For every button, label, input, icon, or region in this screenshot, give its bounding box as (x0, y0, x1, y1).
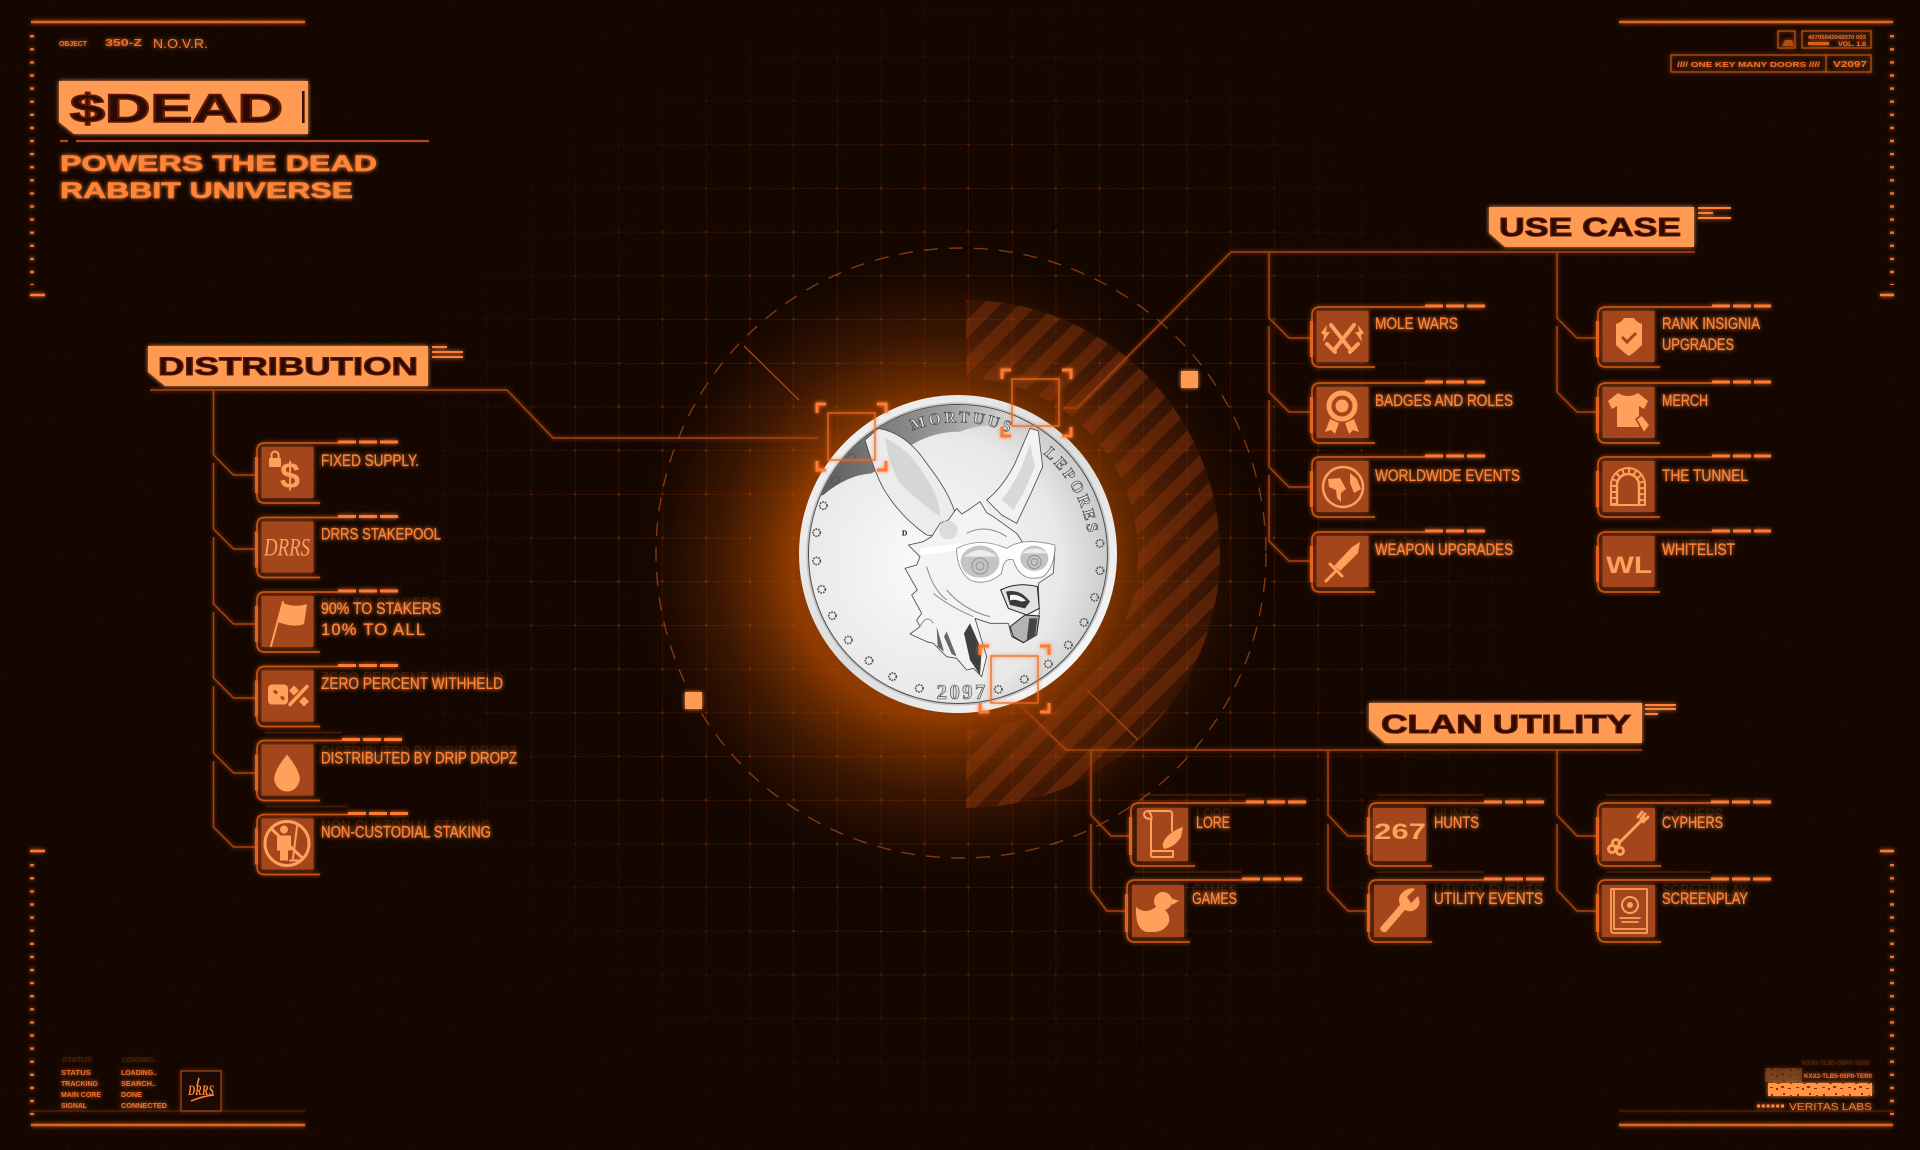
card: non-custodial staking (255, 806, 491, 874)
subtitle (60, 151, 377, 203)
heading: use case (1489, 207, 1731, 247)
label: cyphers: CYPHERS (1662, 814, 1723, 832)
label: games: GAMES (1192, 890, 1237, 908)
icon: 267 numeral: 267 (1374, 819, 1426, 844)
coin: Mortuus Lepores 2097 (799, 395, 1117, 713)
heading: distribution: DISTRIBUTION (158, 353, 418, 381)
label: mole wars: MOLE WARS (1375, 315, 1458, 333)
coin legend: 2097 (937, 682, 987, 704)
label: stakers split: 90% TO STAKERS (321, 600, 441, 618)
card: screenplay (1596, 872, 1772, 942)
coin legend: LEPORES (1043, 446, 1098, 532)
cards: distribution items (255, 442, 517, 874)
label: rank insignia upgrades: RANK INSIGNIA (1662, 315, 1760, 333)
label: weapon upgrades: WEAPON UPGRADES (1375, 541, 1513, 559)
top-left object tag: OBJECT (59, 41, 88, 48)
label: utility events: UTILITY EVENTS (1434, 890, 1543, 908)
connector: use case tree (1064, 252, 1695, 561)
bottom-right Veritas Labs stamp: KXX2-TLB5-05P0-TER0 (1802, 1060, 1870, 1067)
label: rank insignia upgrades: UPGRADES (1662, 336, 1734, 354)
panel: clan utility (1020, 703, 1772, 942)
rabbit sunglasses (923, 542, 1055, 582)
label: distributed by drip dropz: DISTRIBUTED BY DRIP DROPZ (321, 744, 517, 762)
bottom-left status readout: CONNECTED (121, 1103, 167, 1110)
icon: zero percent (262, 670, 314, 722)
label: cyphers: CYPHERS (1662, 806, 1723, 824)
rabbit head (865, 428, 1055, 677)
icon: locked dollar (262, 447, 314, 498)
label: stakers split: 90% TO STAKERS (321, 595, 441, 613)
icon: no custodian (262, 818, 314, 870)
label: hunts: HUNTS (1434, 814, 1479, 832)
label: zero percent withheld: ZERO PERCENT WITHHELD (321, 670, 503, 688)
top-right tag boxes: 40705042042070 003 (1808, 35, 1866, 41)
card: worldwide events (1310, 456, 1520, 517)
card: stakers split (255, 591, 441, 652)
label: stakers split: 10% TO ALL (321, 621, 425, 639)
label: games: GAMES (1192, 882, 1237, 900)
label: lore: LORE (1196, 806, 1230, 824)
title: $DEAD (59, 81, 308, 134)
connector: distribution tree (150, 390, 818, 847)
label: hunts (1434, 806, 1479, 832)
background grid (370, 0, 1550, 1110)
label: weapon upgrades: WEAPON UPGRADES (1375, 537, 1513, 555)
rabbit fur and beard (964, 623, 982, 675)
label: cyphers (1662, 806, 1723, 832)
card: merch (1596, 382, 1771, 443)
cards: clan utility items (1125, 795, 1772, 942)
heading: use case: USE CASE (1499, 212, 1681, 242)
label: lore (1196, 806, 1230, 832)
label: non-custodial staking: NON-CUSTODIAL STAKING (321, 818, 491, 836)
label: zero percent withheld: ZERO PERCENT WITHHELD (321, 675, 503, 693)
bottom-right Veritas Labs stamp: KXX2-TLB5-05P0-TER0 (1804, 1073, 1872, 1080)
card: drrs stakepool (255, 516, 441, 578)
hatched half ring (966, 300, 1220, 808)
subtitle: POWERS THE DEAD (60, 151, 377, 176)
panel: distribution (148, 346, 818, 874)
icon: locked dollar: $ (280, 455, 300, 496)
card: fixed supply (255, 442, 419, 503)
bottom-left status readout: LOADING.. (121, 1070, 157, 1077)
bottom-left status readout (61, 1057, 167, 1110)
card: utility events (1367, 872, 1544, 942)
bottom-left status readout: SIGNAL (61, 1103, 88, 1110)
label: lore: LORE (1196, 814, 1230, 832)
top-left object tag (59, 36, 208, 51)
subtitle: RABBIT UNIVERSE (60, 178, 353, 203)
bottom-left status readout: DONE (121, 1092, 142, 1099)
icon: DRRS logo box: DRRS (187, 1083, 214, 1099)
dashed orbit ring (656, 248, 1266, 858)
card: weapon upgrades (1310, 531, 1513, 592)
icon: 267 numeral (1373, 808, 1426, 861)
label: badges and roles: BADGES AND ROLES (1375, 392, 1513, 410)
label: screenplay: SCREENPLAY (1662, 890, 1748, 908)
card: lore (1129, 795, 1307, 866)
icon: ornate key (1602, 808, 1655, 861)
coin legend (902, 411, 1098, 704)
icon: rosette (1316, 387, 1368, 438)
bottom-left status readout: STATUS (62, 1057, 92, 1064)
card: mole wars (1310, 306, 1487, 367)
label: hunts: HUNTS (1434, 806, 1479, 824)
label: weapon upgrades (1375, 537, 1513, 559)
card: the tunnel (1596, 456, 1771, 517)
icon: globe (1316, 461, 1368, 512)
top-right tag boxes: VOL. 1.8 (1838, 42, 1867, 48)
top-right tag boxes (1671, 31, 1871, 72)
label: fixed supply: FIXED SUPPLY. (321, 452, 419, 470)
label: screenplay (1662, 882, 1748, 908)
label: rank insignia upgrades (1662, 315, 1760, 354)
bottom-left status readout: MAIN CORE (61, 1092, 101, 1099)
coin legend: MORTUUS (908, 411, 1012, 432)
icon: t-shirt with tag (1602, 387, 1654, 438)
label: whitelist: WHITELIST (1662, 537, 1735, 555)
icon: water drop (262, 744, 314, 796)
label: the tunnel: THE TUNNEL (1662, 467, 1748, 485)
target brackets and accent squares (685, 370, 1198, 712)
heading: clan utility: CLAN UTILITY (1381, 709, 1631, 739)
bottom-left status readout: LOADING.. (122, 1057, 158, 1064)
icon: drrs logo (262, 522, 314, 572)
icon: drrs logo: DRRS (263, 534, 310, 562)
label: non-custodial staking: NON-CUSTODIAL STAKING (321, 824, 491, 842)
label: merch: MERCH (1662, 392, 1708, 410)
cards: use case items (1310, 306, 1771, 592)
title: $DEAD: $DEAD (70, 87, 283, 131)
card: badges and roles (1310, 382, 1513, 443)
central orange glow (625, 245, 1265, 885)
label: whitelist: WHITELIST (1662, 541, 1735, 559)
icon: film book (1602, 885, 1655, 937)
label: utility events: UTILITY EVENTS (1434, 882, 1543, 900)
card: hunts (1367, 795, 1544, 866)
label: games (1192, 882, 1237, 908)
label: distributed by drip dropz: DISTRIBUTED BY DRIP DROPZ (321, 750, 517, 768)
bottom-right Veritas Labs stamp: VERITAS LABS (1789, 1102, 1872, 1113)
icon: DRRS logo box (181, 1071, 221, 1111)
heading: distribution (148, 346, 463, 386)
card: distributed by drip dropz (255, 732, 517, 800)
top-right tag boxes: //// ONE KEY MANY DOORS //// (1677, 60, 1821, 69)
label: worldwide events: WORLDWIDE EVENTS (1375, 467, 1520, 485)
card: cyphers (1596, 795, 1772, 866)
card: zero percent withheld (255, 666, 503, 726)
card: whitelist (1596, 531, 1771, 592)
heading: clan utility (1369, 703, 1676, 743)
decorative pointer lines (744, 346, 1138, 740)
label: stakers split (321, 595, 441, 639)
panel: use case (1064, 207, 1771, 592)
icon: sword (1316, 536, 1368, 587)
label: distributed by drip dropz (321, 744, 517, 768)
top-right tag boxes: V2097 (1833, 60, 1868, 69)
top-left object tag: 350-Z (105, 38, 142, 49)
icon: scroll and quill (1137, 808, 1188, 861)
bottom-left status readout: SEARCH.. (121, 1081, 156, 1088)
coin stars (813, 454, 1104, 693)
bottom-left status readout: TRACKING (61, 1081, 99, 1088)
label: zero percent withheld (321, 670, 503, 693)
icon: WL mark (1602, 536, 1654, 587)
icon: shield badge (1602, 311, 1654, 362)
icon: WL mark: WL (1606, 552, 1652, 579)
icon: crossed swords (1316, 311, 1368, 362)
label: utility events (1434, 882, 1543, 908)
card: games (1125, 872, 1302, 942)
icon: wrench (1374, 885, 1426, 937)
bottom-right Veritas Labs stamp (1757, 1060, 1872, 1113)
label: screenplay: SCREENPLAY (1662, 882, 1748, 900)
card: rank insignia upgrades (1596, 306, 1771, 367)
rabbit nose and tongue (1001, 585, 1039, 615)
connector: clan utility tree (1020, 705, 1642, 911)
bottom-left status readout: STATUS (61, 1070, 91, 1077)
label: non-custodial staking (321, 818, 491, 842)
icon: rubber duck (1132, 885, 1184, 937)
icon: tunnel arch (1602, 461, 1654, 512)
icon: flag (262, 596, 314, 647)
coin legend: D (902, 528, 907, 537)
label: drrs stakepool: DRRS STAKEPOOL (321, 526, 441, 544)
top-left object tag: N.O.V.R. (153, 36, 208, 51)
title divider (60, 140, 429, 142)
